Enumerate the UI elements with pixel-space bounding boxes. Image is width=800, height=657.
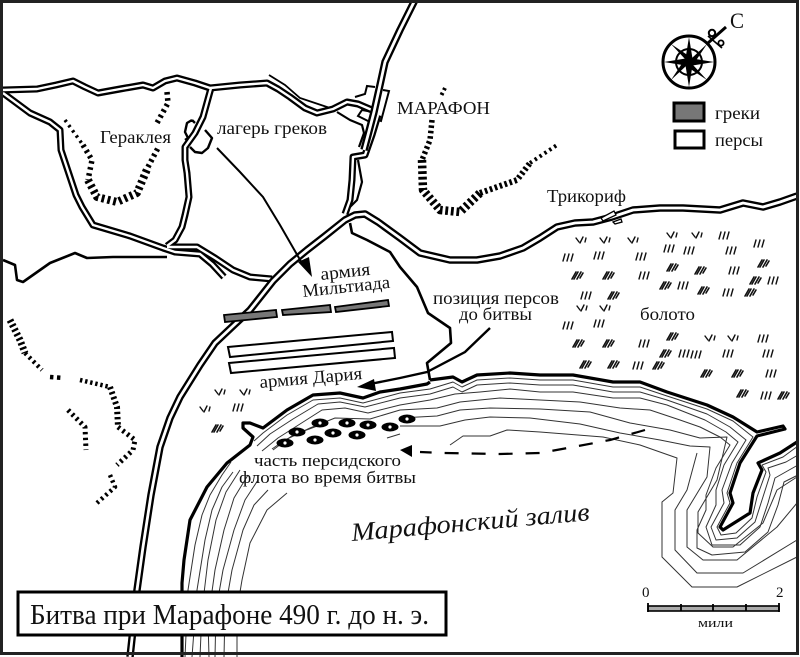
label: army of Darius: армия Дария <box>259 363 363 392</box>
side roads <box>3 78 378 279</box>
coastline east <box>430 373 797 530</box>
label: part of the Persian fleet <box>239 451 417 487</box>
label: Heraclea: Гераклея <box>100 127 171 147</box>
label: marsh: болото <box>640 304 695 324</box>
hachured hills <box>10 88 557 503</box>
Persian army bars <box>228 332 395 373</box>
label: Persian position <box>433 288 559 324</box>
arrow: Greek camp to army of Miltiades <box>217 148 312 277</box>
Greek camp <box>185 120 212 153</box>
label: Greek camp: лагерь греков <box>217 118 327 138</box>
town of Marathon <box>355 86 389 122</box>
bridge at Trikorif <box>601 211 622 224</box>
stream along road near the town <box>337 112 364 213</box>
stream north <box>269 75 330 108</box>
stream to the sea <box>350 223 451 380</box>
ship highlights <box>283 417 409 445</box>
scale bar: 2 <box>776 585 784 601</box>
hill: Heraclea <box>65 92 168 202</box>
hill: Marathon <box>422 88 557 212</box>
label: Bay of Marathon: Марафонский залив <box>349 497 591 547</box>
Persian ships <box>276 414 416 448</box>
arrow: Persian position to army of Darius <box>357 328 490 391</box>
scale bar <box>642 585 784 630</box>
scale bar: 0 <box>642 585 650 601</box>
hills: southwest <box>10 320 135 503</box>
Greek army bars <box>224 300 389 322</box>
bay depth contours <box>185 378 798 657</box>
label: Marathon: МАРАФОН <box>397 98 490 118</box>
title box: Битва при Марафоне 490 г. до н. э. <box>30 600 429 631</box>
label: Persian position: до битвы <box>459 304 532 324</box>
label: Persian position: позиция персов <box>433 288 559 308</box>
scale bar: мили <box>698 615 733 630</box>
legend: Persians <box>675 130 763 150</box>
title box <box>18 592 446 635</box>
label: army of Miltiades: Мильтиада <box>301 272 391 301</box>
compass rose <box>663 27 726 88</box>
legend: Greeks <box>674 103 760 123</box>
north label: С <box>730 8 744 33</box>
label: army of Miltiades: армия <box>319 259 371 284</box>
legend: Persians: персы <box>715 130 763 150</box>
legend: Greeks: греки <box>715 103 760 123</box>
label: Tricorythus: Трикориф <box>547 186 626 206</box>
coastline <box>182 382 430 657</box>
label: part of the Persian fleet: часть персидского <box>254 451 401 470</box>
arrow: fleet movement dashed <box>400 430 645 457</box>
label: army of Miltiades <box>301 259 391 301</box>
label: part of the Persian fleet: флота во время битвы <box>239 468 417 487</box>
marsh tufts <box>200 232 789 432</box>
river <box>3 253 167 282</box>
